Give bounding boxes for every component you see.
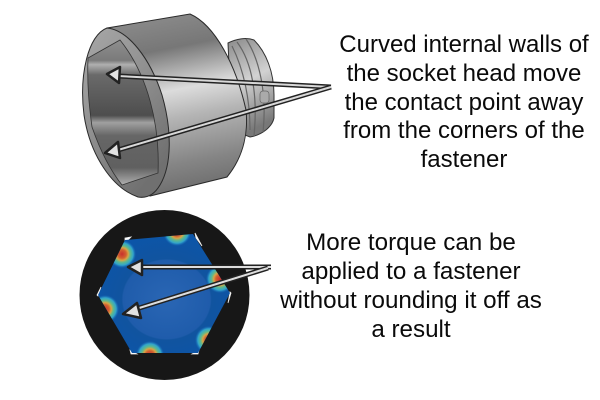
socket front rim (83, 28, 169, 197)
text block: more torque: More torque can be (306, 229, 516, 256)
blue hexagon head (98, 234, 230, 353)
text block: curved walls: from the corners of the (343, 117, 585, 144)
socket drive end (228, 39, 274, 137)
text block: curved walls: fastener (421, 146, 507, 173)
stress hot spots (99, 234, 228, 353)
text block: more torque (279, 229, 542, 343)
arrow: upper hexagon pointer (128, 260, 271, 275)
arrow: lower hexagon pointer (123, 268, 268, 318)
text block: curved walls: the contact point away (345, 89, 583, 116)
text block: curved walls: Curved internal walls of (339, 31, 589, 58)
socket outer body (107, 14, 247, 196)
white corner gaps (97, 233, 231, 354)
text block: curved walls (339, 31, 589, 173)
text block: more torque: without rounding it off as (279, 287, 542, 314)
text block: more torque: a result (371, 316, 451, 343)
arrow: upper socket pointer (107, 67, 331, 87)
illustration: socket (83, 14, 274, 197)
infographic canvas (80, 14, 589, 380)
arrow: lower socket pointer (105, 87, 331, 158)
text block: curved walls: the socket head move (347, 60, 581, 87)
socket hexagonal opening (88, 40, 158, 185)
illustration: fastener cross-section (80, 210, 250, 380)
text block: more torque: applied to a fastener (301, 258, 521, 285)
black socket ring (80, 210, 250, 380)
